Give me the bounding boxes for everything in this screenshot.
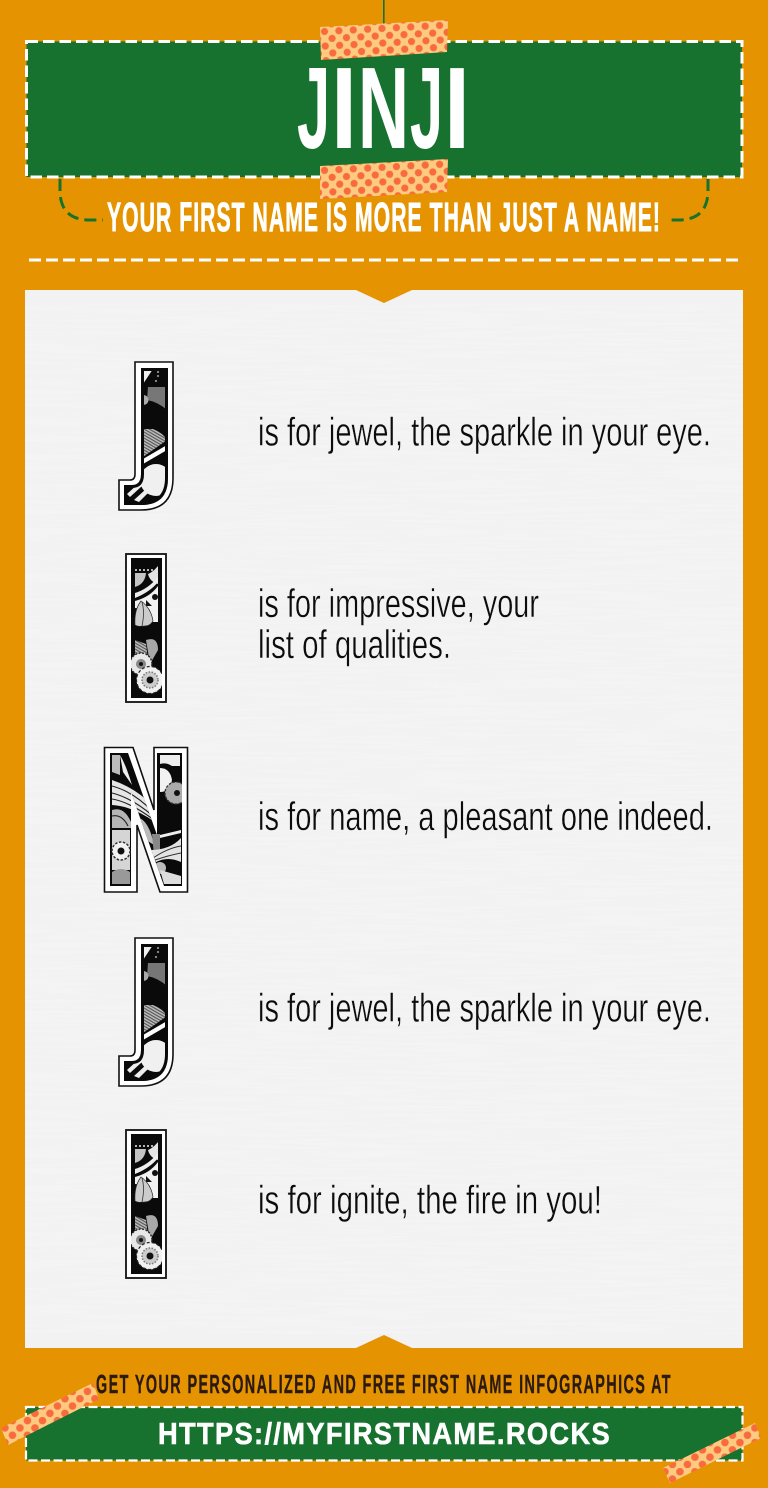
hanging string	[383, 0, 385, 26]
text: I line: is for ignite, the fire in you!	[258, 1178, 602, 1222]
title: N	[358, 43, 409, 173]
text: I line: list of qualities.	[258, 623, 451, 667]
connector: right dashed curve	[668, 179, 708, 220]
tape: right	[663, 1423, 761, 1483]
tape: bottom	[320, 159, 448, 199]
text: I line: is for impressive, your	[258, 582, 539, 626]
text: I line	[258, 582, 539, 667]
title: J	[410, 43, 443, 173]
title: I	[444, 43, 470, 173]
letter I	[126, 1130, 166, 1278]
letter J	[119, 938, 173, 1086]
title: J	[297, 43, 330, 173]
panel: letters	[25, 290, 743, 1348]
letter J	[119, 362, 173, 510]
connector: left dashed curve	[60, 179, 103, 220]
footer banner	[26, 1407, 742, 1460]
letter N	[104, 748, 188, 892]
tape: left	[1, 1383, 99, 1445]
footer url: HTTPS://MYFIRSTNAME.ROCKS	[158, 1417, 611, 1451]
title: I	[331, 43, 357, 173]
tape: top	[320, 20, 448, 60]
letter I	[126, 554, 166, 702]
title banner	[26, 42, 742, 177]
